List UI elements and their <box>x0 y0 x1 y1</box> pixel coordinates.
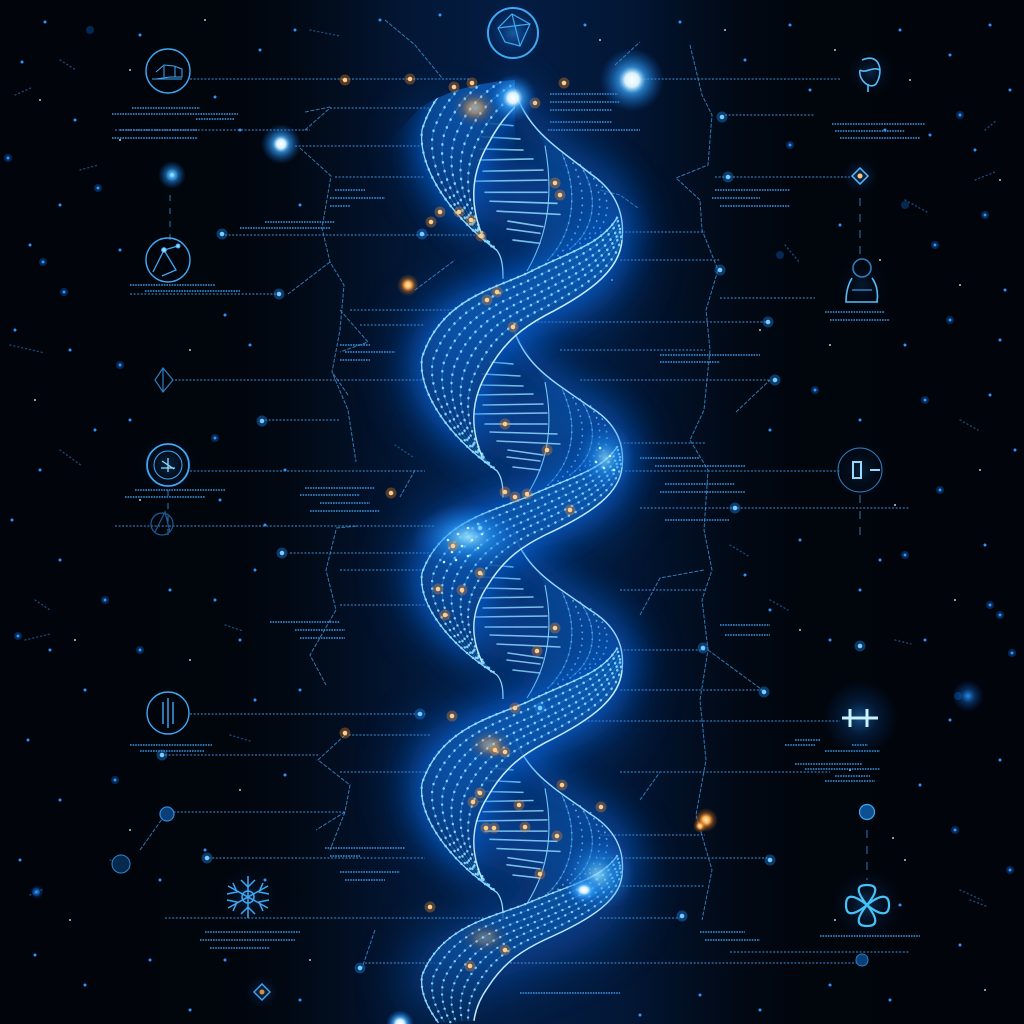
helix: ribbons <box>422 218 622 1023</box>
icon: left circle 3 <box>138 435 198 495</box>
icon: snowflake <box>218 867 278 927</box>
orange nodes <box>345 79 718 966</box>
icon: left faint circle <box>151 512 173 535</box>
wide helix halo <box>440 120 600 1000</box>
leader lines left <box>115 79 500 963</box>
icon: right top symbol <box>846 48 894 96</box>
icon: clover <box>831 869 903 941</box>
bright glow nodes <box>158 48 984 1024</box>
icon: left circle 1 <box>146 49 190 93</box>
icon: left diamond <box>155 368 173 392</box>
helix: back segments with rungs <box>475 85 623 906</box>
icon: small node bottom left <box>30 807 174 899</box>
icon: right diamond <box>842 158 878 194</box>
icon: top ring <box>481 1 545 65</box>
helix: top crescent <box>400 80 515 279</box>
icon: right node <box>856 804 874 966</box>
icon: left circle 4 <box>147 692 189 734</box>
icon: right plus symbol <box>822 680 898 756</box>
icon: left circle 2 <box>146 238 190 282</box>
left constellation network <box>140 20 455 968</box>
tiny text-like lines right <box>520 94 925 993</box>
icon: right circle <box>830 440 890 500</box>
blue nodes <box>162 117 860 968</box>
leader lines right <box>510 79 910 963</box>
tiny text-like lines left <box>112 108 405 948</box>
right constellation network <box>168 42 867 920</box>
icon: right bell <box>834 257 890 313</box>
icon: bottom diamond <box>246 976 278 1008</box>
helix bright highlights <box>412 90 636 954</box>
